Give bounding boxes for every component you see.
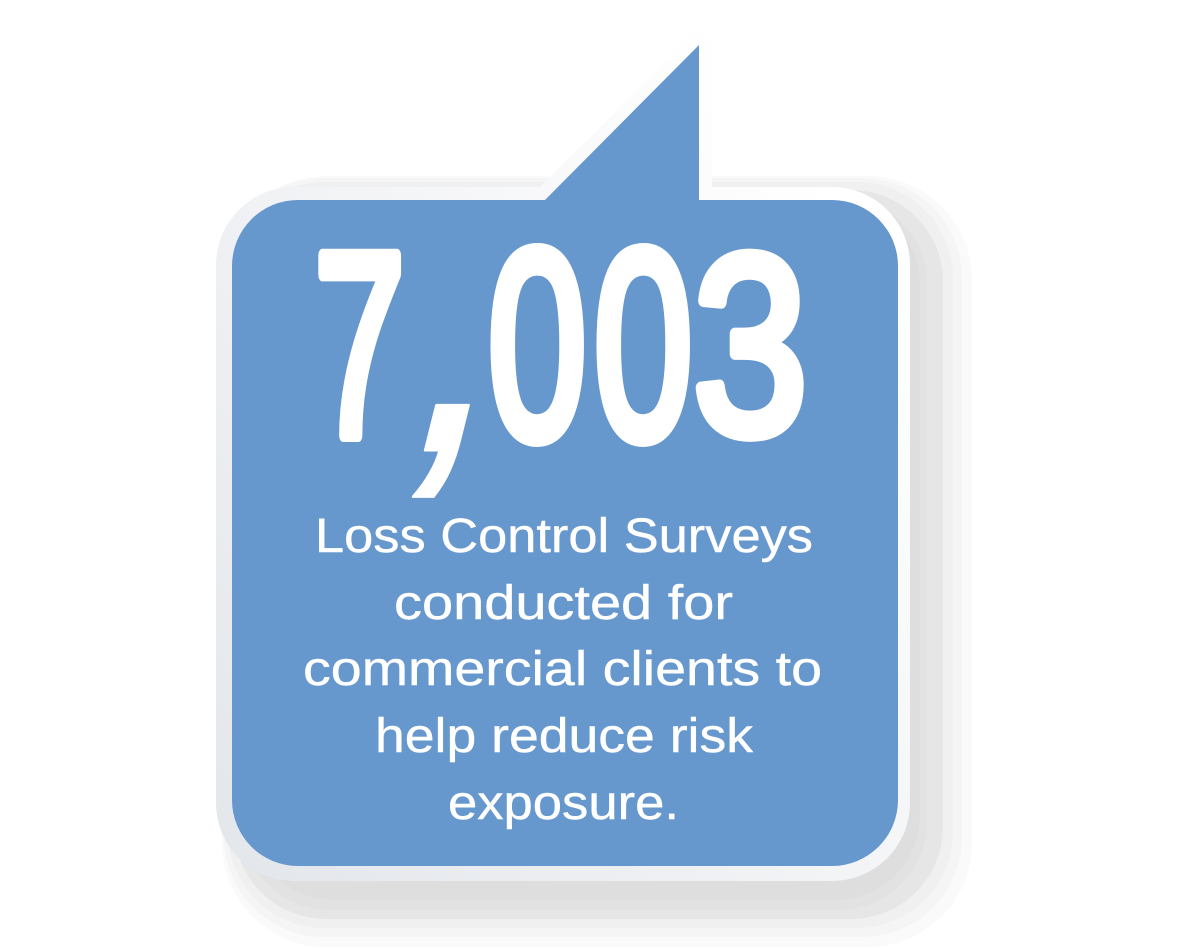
headline number: 7,003: [314, 178, 808, 514]
description text: commercial clients to: [303, 643, 822, 696]
headline number: 7,003: 3: [693, 203, 808, 488]
speech bubble rim: [216, 28, 910, 881]
headline number: 7,003: ,: [393, 178, 541, 514]
headline number: 7,003: 0: [488, 195, 586, 495]
layered drop shadow: [222, 176, 972, 947]
description text: [303, 510, 822, 830]
headline number: 7,003: 7: [314, 199, 405, 492]
headline number: 7,003: 0: [594, 195, 692, 495]
speech bubble body with tail: [232, 45, 898, 866]
description text: exposure.: [448, 777, 679, 830]
description text: help reduce risk: [375, 710, 754, 763]
description text: Loss Control Surveys: [315, 510, 813, 563]
description text: conducted for: [394, 577, 733, 630]
